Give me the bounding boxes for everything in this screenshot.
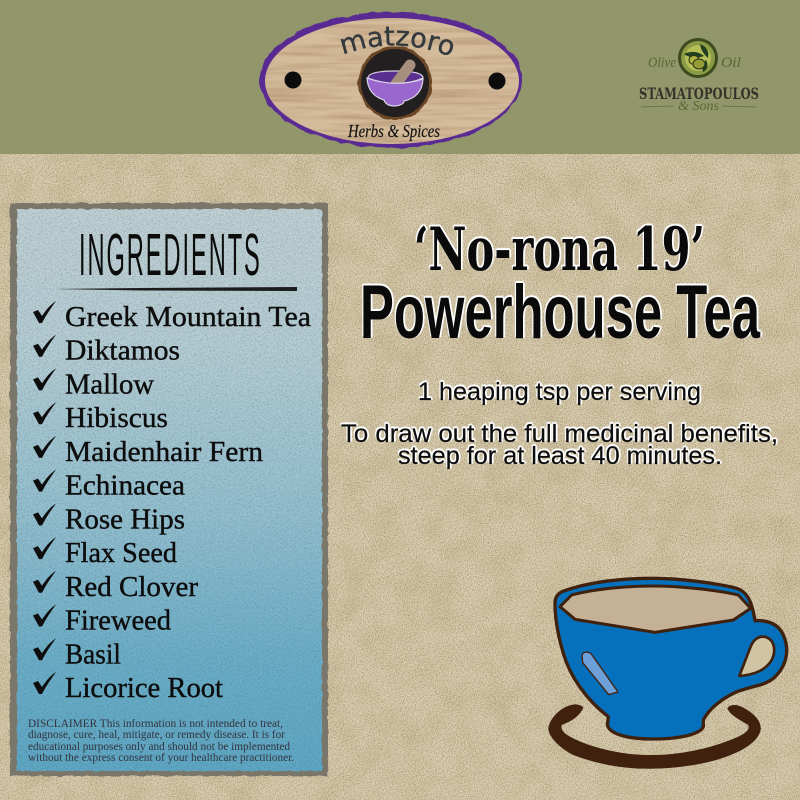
heading brush rule xyxy=(54,287,297,291)
instruction: steeping time xyxy=(341,420,778,470)
panel frame xyxy=(10,203,328,776)
ingredients heading: INGREDIENTS xyxy=(79,221,260,288)
brand suffix: and sons: & Sons xyxy=(678,99,720,114)
disclaimer: diagnose, cure, heal, mitigate, or remedy disease. It is for xyxy=(28,727,285,741)
ingredient: mallow: Mallow xyxy=(65,368,154,400)
logo tagline: herbs and spices: Herbs & Spices xyxy=(347,121,440,141)
icon: blue tea cup on saucer xyxy=(548,578,787,769)
instruction: serving size: 1 heaping tsp per serving xyxy=(418,378,701,406)
ingredient: red clover: Red Clover xyxy=(65,571,198,603)
olive emblem xyxy=(678,38,718,78)
header band xyxy=(0,0,800,154)
disclaimer xyxy=(28,716,294,764)
disclaimer: DISCLAIMER This information is not intended to treat, xyxy=(28,716,283,730)
olive label: Olive xyxy=(648,55,676,71)
ingredient: fireweed: Fireweed xyxy=(65,604,171,636)
ingredient: maidenhair fern: Maidenhair Fern xyxy=(65,436,263,468)
oil label: Oil xyxy=(721,55,741,71)
logo: stamatopoulos olive oil xyxy=(639,38,759,114)
logo mounting holes xyxy=(284,72,506,90)
logo emblem: mortar and pestle xyxy=(358,46,432,120)
ingredient: basil xyxy=(33,638,121,670)
logo wordmark: matzoro: matzoro xyxy=(340,26,454,56)
panel paper fill xyxy=(17,209,322,771)
instruction: steeping time: To draw out the full medicinal benefits, xyxy=(341,420,778,448)
panel: ingredients xyxy=(10,203,328,776)
disclaimer: without the express consent of your healthcare practitioner. xyxy=(28,750,294,764)
ingredient: flax seed: Flax Seed xyxy=(65,537,177,569)
disclaimer: educational purposes only and should not be implemented xyxy=(28,739,290,753)
tea surface xyxy=(560,586,751,632)
ingredient: licorice root: Licorice Root xyxy=(65,672,223,704)
cup highlight xyxy=(582,652,618,695)
cup body xyxy=(555,578,787,739)
ingredient: hibiscus: Hibiscus xyxy=(65,402,168,434)
saucer xyxy=(548,704,761,769)
cup handle opening xyxy=(739,637,774,676)
ingredient: rose hips: Rose Hips xyxy=(65,503,185,535)
ingredient: greek mountain tea: Greek Mountain Tea xyxy=(65,301,311,333)
logo: matzoro herbs and spices xyxy=(259,12,522,149)
ingredient: basil: Basil xyxy=(65,638,121,670)
logo plaque: purple rim and wood xyxy=(260,12,522,148)
ingredient: diktamos: Diktamos xyxy=(65,335,180,367)
instruction: steeping time: steep for at least 40 minutes. xyxy=(398,442,722,470)
ingredient: echinacea: Echinacea xyxy=(65,470,185,502)
